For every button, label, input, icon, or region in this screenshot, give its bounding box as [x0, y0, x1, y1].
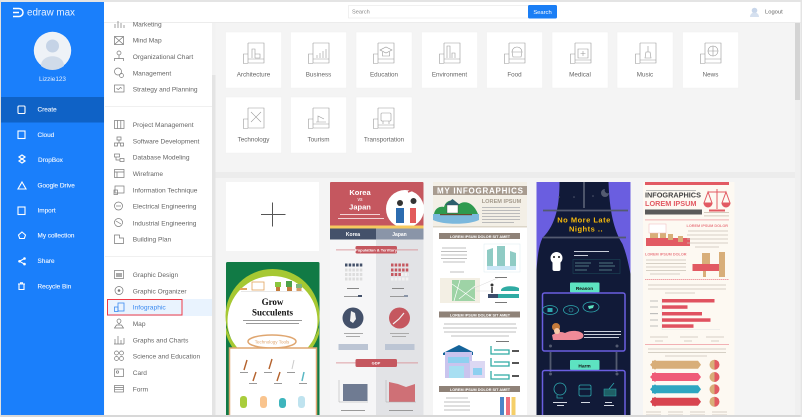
- succulents title: Succulents: [252, 308, 293, 318]
- card: news: News: [703, 72, 718, 78]
- lorem ipsum heading: LOREM IPSUM: [482, 199, 522, 205]
- google drive: Google Drive: [38, 182, 75, 190]
- card: transportation: [356, 97, 412, 153]
- population badge: Population & Territory: [355, 248, 398, 253]
- korea title: [349, 188, 371, 212]
- section band 1: LOREM IPSUM DOLOR SIT AMET: [450, 235, 511, 239]
- card: business: Business: [306, 72, 331, 78]
- harm tag: [570, 360, 600, 370]
- succulents title: [252, 297, 293, 318]
- menu items: Organizational Chart: [133, 54, 193, 61]
- search input: Search: [352, 10, 370, 16]
- menu items: Management: [133, 70, 171, 77]
- reason tag: [570, 282, 600, 292]
- share: Share: [38, 258, 55, 265]
- population badge: [355, 246, 398, 254]
- infographics title: LOREM IPSUM: [645, 199, 696, 208]
- menu items: Form: [133, 386, 149, 393]
- ribbon list: [650, 360, 701, 407]
- selected row highlight: [107, 299, 212, 316]
- top bar: [0, 0, 802, 23]
- infographics title: [645, 190, 701, 208]
- card: medical: [552, 32, 608, 88]
- section band 3: [439, 386, 520, 392]
- menu items: Information Technique: [133, 187, 198, 194]
- import: Import: [38, 208, 56, 214]
- korea japan tabs: [330, 228, 424, 240]
- card: music: [617, 32, 673, 88]
- korea japan tabs: Japan: [392, 232, 407, 238]
- lorem heading 2: LOREM IPSUM DOLOR: [645, 252, 687, 256]
- menu items: Science and Education: [133, 354, 200, 361]
- korea title: Korea: [349, 188, 371, 197]
- card: food: [486, 32, 542, 88]
- recycle bin: [18, 283, 72, 290]
- new blank card: [226, 182, 319, 251]
- menu items: Graphs and Charts: [133, 337, 189, 344]
- cloud: Cloud: [38, 132, 55, 139]
- dropbox: [19, 155, 64, 164]
- card: technology: Technology: [238, 136, 270, 144]
- page scrollbar: [795, 23, 800, 415]
- card: technology: [226, 97, 282, 153]
- bar chart: [650, 298, 720, 330]
- share: [18, 257, 55, 265]
- my infographics title: MY INFOGRAPHICS: [437, 186, 524, 196]
- menu items: Marketing: [133, 21, 162, 28]
- logo: edraw max: [27, 8, 75, 18]
- card: education: Education: [370, 72, 398, 78]
- template: infographics lorem ipsum: [643, 182, 734, 417]
- user logout: [750, 8, 783, 17]
- google drive: [18, 182, 75, 190]
- nights title: No More Late: [557, 216, 611, 224]
- card: food: Food: [507, 72, 522, 78]
- template: grow succulents: [226, 262, 320, 417]
- section band 1: [439, 233, 520, 239]
- active item: create: Create: [38, 106, 57, 114]
- menu items: Infographic: [133, 304, 166, 312]
- harm tag: Harm: [578, 363, 591, 369]
- infographics title: INFOGRAPHICS: [645, 190, 701, 200]
- search button: [528, 5, 557, 18]
- template categories: [226, 32, 738, 153]
- section band 3: LOREM IPSUM DOLOR SIT AMET: [450, 388, 511, 392]
- my collection: My collection: [38, 232, 75, 240]
- lorem heading 1: LOREM IPSUM DOLOR: [686, 224, 728, 228]
- menu items: Electrical Engineering: [133, 204, 197, 211]
- menu items: Card: [133, 370, 147, 377]
- avatar: [34, 32, 71, 70]
- dropbox: DropBox: [38, 157, 64, 164]
- recycle bin: Recycle Bin: [38, 284, 72, 290]
- template: my infographics: [433, 182, 527, 417]
- menu items: Industrial Engineering: [133, 220, 197, 227]
- menu icons: [114, 21, 124, 392]
- menu items: Database Modeling: [133, 155, 190, 162]
- nights title: [557, 216, 611, 234]
- card: news: [682, 32, 738, 88]
- template: grow succulents: Technology Tools: [255, 340, 290, 344]
- menu items: Software Development: [133, 138, 200, 145]
- user logout: Logout: [765, 10, 783, 16]
- template: no more late nights: [536, 182, 630, 417]
- reason tag: Reason: [576, 286, 593, 292]
- gdp badge: [356, 359, 397, 367]
- menu items: Mind Map: [133, 38, 162, 45]
- korea title: Japan: [349, 202, 371, 212]
- menu items: Strategy and Planning: [133, 87, 198, 94]
- card: environment: Environment: [432, 72, 467, 78]
- my collection: [18, 232, 75, 240]
- active item: create: [1, 97, 104, 122]
- section band 2: [439, 312, 520, 318]
- content divider: [216, 172, 796, 178]
- nights title: Nights ..: [569, 224, 603, 234]
- card: architecture: [226, 32, 282, 88]
- card: medical: Medical: [569, 72, 591, 78]
- gdp charts: [339, 380, 416, 402]
- card: tourism: [290, 97, 346, 153]
- gdp badge: GDP: [372, 360, 381, 366]
- username: Lizzie123: [39, 76, 66, 83]
- import: [18, 207, 56, 214]
- card: tourism: Tourism: [307, 136, 330, 144]
- category menu panel: [104, 21, 216, 415]
- card: education: [356, 32, 412, 88]
- half circle icons: [710, 360, 720, 407]
- scales icon: [704, 189, 730, 210]
- card: transportation: Transportation: [364, 136, 405, 144]
- korea japan tabs: Korea: [346, 232, 360, 238]
- korea title: vs: [358, 197, 363, 203]
- card: environment: [422, 32, 478, 88]
- card: business: [290, 32, 346, 88]
- template: korea vs japan: [330, 182, 424, 417]
- menu items: Project Management: [133, 122, 194, 129]
- menu items: Graphic Design: [133, 272, 178, 279]
- search input: [348, 6, 528, 18]
- section band 2: LOREM IPSUM DOLOR SIT AMET: [450, 313, 511, 317]
- cloud: [18, 131, 55, 139]
- red highlight box: [108, 300, 182, 315]
- card: architecture: Architecture: [237, 72, 271, 78]
- card: music: Music: [637, 72, 653, 78]
- menu items: Building Plan: [133, 236, 172, 244]
- sidebar: [1, 2, 104, 415]
- menu items: [133, 21, 200, 393]
- menu items: Graphic Organizer: [133, 288, 187, 295]
- menu items: Wireframe: [133, 171, 163, 178]
- menu items: Map: [133, 321, 146, 328]
- search button: Search: [533, 10, 552, 16]
- succulents title: Grow: [262, 297, 284, 307]
